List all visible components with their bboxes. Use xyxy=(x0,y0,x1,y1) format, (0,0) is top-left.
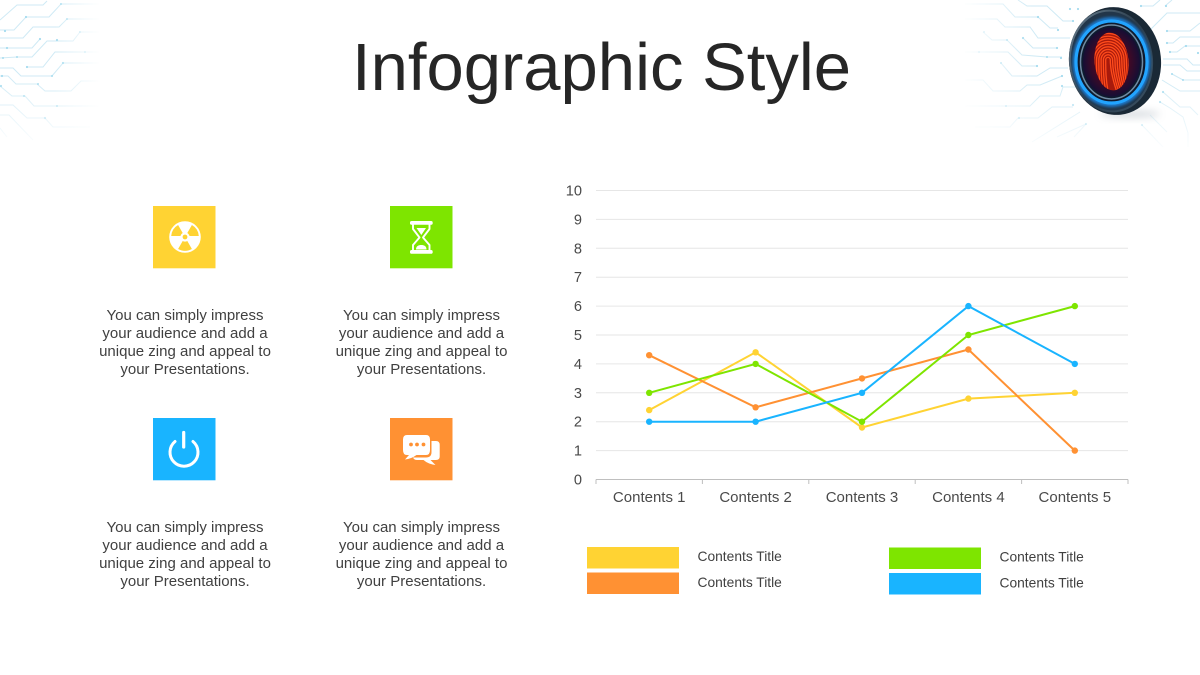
x axis labels: Contents 1 xyxy=(613,489,685,506)
y axis labels: 5 xyxy=(574,328,582,344)
text block: orange item: You can simply impress xyxy=(343,519,500,536)
text block: blue item: your audience and add a xyxy=(102,537,268,554)
series: green xyxy=(646,303,1078,425)
x axis labels: Contents 4 xyxy=(932,489,1005,506)
legend: Contents Title xyxy=(1000,550,1084,564)
legend: Contents Title xyxy=(698,549,782,564)
title: Infographic Style xyxy=(352,30,851,105)
decoration: right circuit pattern xyxy=(965,0,1200,147)
series: orange xyxy=(646,346,1078,454)
line chart xyxy=(566,184,1128,506)
y axis labels: 3 xyxy=(574,386,582,402)
text block: orange item: your Presentations. xyxy=(357,573,486,590)
y axis labels: 8 xyxy=(574,241,582,257)
icon: speech bubbles on orange square xyxy=(390,418,452,480)
text block: orange item xyxy=(336,519,507,590)
text block: blue item: You can simply impress xyxy=(106,519,264,536)
icon: hourglass on green square xyxy=(390,206,452,268)
text block: yellow item: your Presentations. xyxy=(120,361,250,378)
x axis labels: Contents 3 xyxy=(826,489,898,506)
text block: yellow item: unique zing and appeal to xyxy=(99,343,271,360)
text block: orange item: your audience and add a xyxy=(339,537,504,554)
decoration: left circuit pattern xyxy=(0,1,100,140)
text block: green item: unique zing and appeal to xyxy=(336,343,507,360)
series: yellow xyxy=(646,349,1078,431)
icon: radiation on yellow square xyxy=(153,206,216,268)
text block: yellow item: your audience and add a xyxy=(102,325,268,342)
text block: orange item: unique zing and appeal to xyxy=(336,555,507,572)
text block: green item: your audience and add a xyxy=(339,325,504,342)
y axis labels: 1 xyxy=(574,444,582,460)
y axis labels xyxy=(566,184,582,488)
y axis labels: 4 xyxy=(574,357,582,373)
text block: yellow item xyxy=(99,307,271,378)
x axis labels: Contents 2 xyxy=(719,489,792,506)
y axis labels: 0 xyxy=(574,472,582,488)
y axis labels: 6 xyxy=(574,299,582,315)
icon: power on blue square xyxy=(153,418,216,480)
x axis labels: Contents 5 xyxy=(1039,489,1111,506)
legend: Contents Title xyxy=(1000,576,1084,590)
text block: blue item: your Presentations. xyxy=(120,573,250,590)
y axis labels: 2 xyxy=(574,415,582,431)
y axis labels: 9 xyxy=(574,212,582,228)
text block: blue item xyxy=(99,519,271,590)
series: blue xyxy=(646,303,1078,425)
text block: green item xyxy=(336,307,507,378)
text block: yellow item: You can simply impress xyxy=(106,307,264,324)
y axis labels: 10 xyxy=(566,184,582,200)
text block: green item: You can simply impress xyxy=(343,307,500,324)
text block: blue item: unique zing and appeal to xyxy=(99,555,271,572)
y axis labels: 7 xyxy=(574,270,582,286)
icon: fingerprint button xyxy=(1068,7,1162,121)
text block: green item: your Presentations. xyxy=(357,361,486,378)
x axis labels xyxy=(613,489,1111,506)
legend: Contents Title xyxy=(698,575,782,590)
legend xyxy=(587,547,1084,594)
